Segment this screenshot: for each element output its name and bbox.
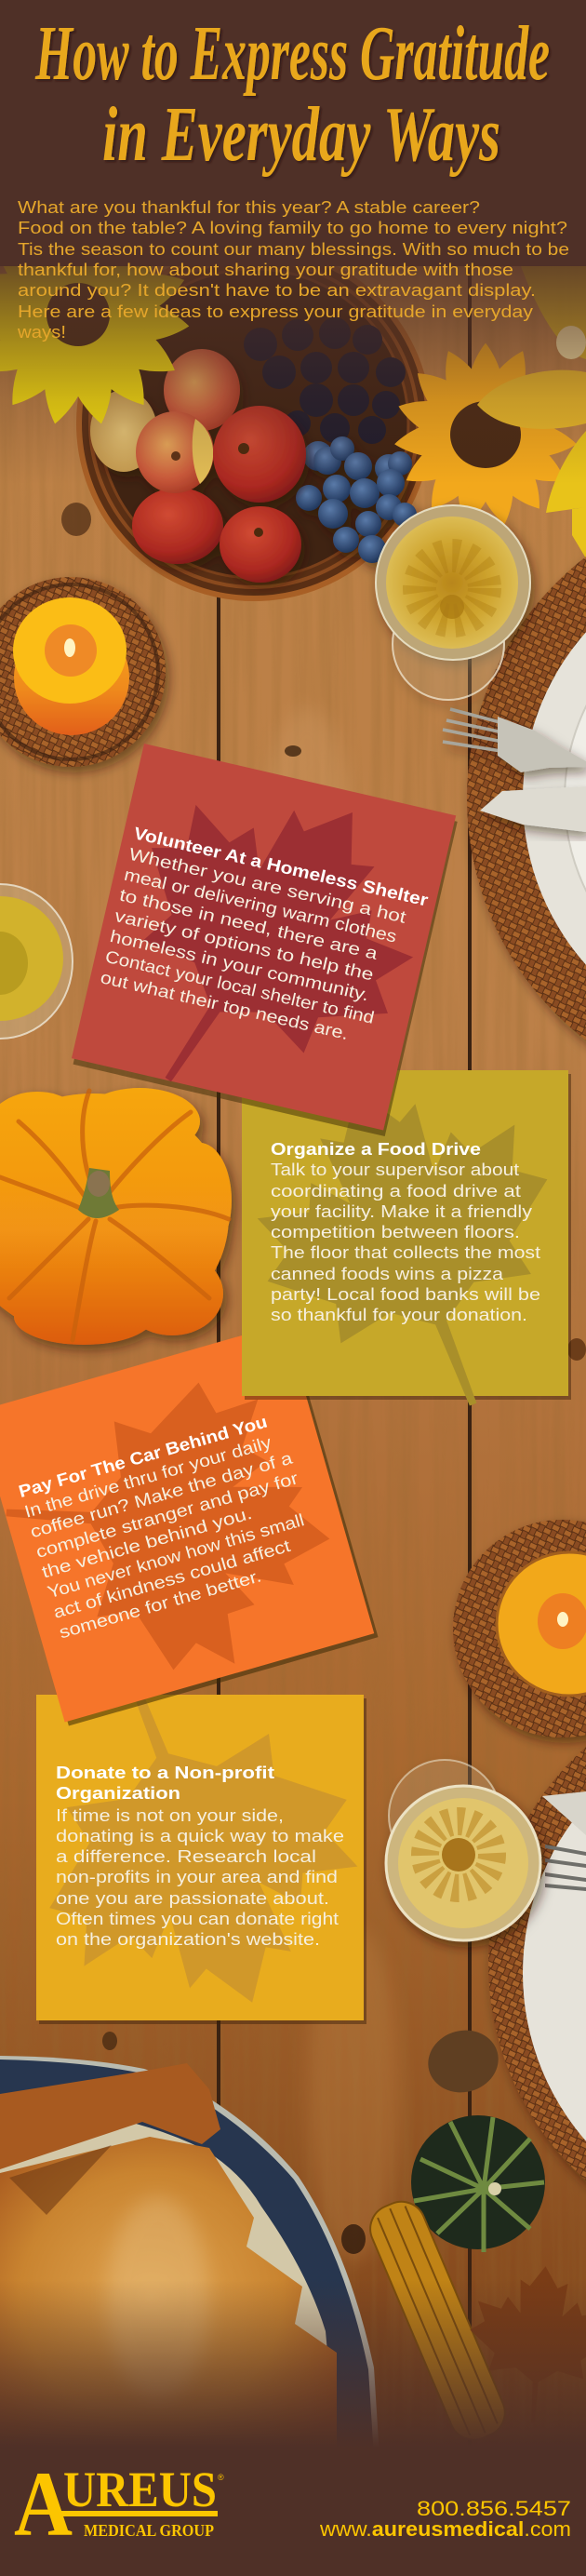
basket rim: [79, 248, 429, 598]
body text: [56, 1805, 344, 1949]
heading: [56, 1763, 274, 1803]
knife and fork: [542, 1791, 586, 1891]
walnut: [428, 2031, 499, 2092]
heading: Organize a Food Drive: [271, 1139, 481, 1159]
body text: competition between floors.: [271, 1222, 520, 1241]
heading: Donate to a Non-profit: [56, 1763, 274, 1782]
body text: canned foods wins a pizza: [271, 1264, 504, 1283]
intro text: What are you thankful for this year? A stable career?: [18, 197, 480, 217]
text: [17, 1407, 324, 1643]
logo: Aureus Medical Group: ®: [218, 2473, 224, 2482]
text: out what their top needs are.: [99, 967, 351, 1043]
pumpkin stem: [78, 1168, 119, 1218]
blue grapes: [296, 436, 417, 563]
text: Whether you are serving a hot: [127, 844, 408, 927]
text: [99, 823, 430, 1054]
leaf watermark: [217, 1040, 586, 1456]
text: to those in need, there are a: [118, 885, 380, 963]
body text: donating is a quick way to make: [56, 1826, 344, 1845]
intro text: [17, 197, 569, 342]
candle left: [0, 577, 166, 767]
candle right: [453, 1520, 586, 1737]
dinner plate bottom with placemat: [486, 1747, 586, 2191]
body text: so thankful for your donation.: [271, 1305, 527, 1324]
fork: [443, 709, 586, 772]
panel: donate to a non-profit: [0, 1614, 401, 2057]
body text: The floor that collects the most: [271, 1242, 540, 1262]
text: Volunteer At a Homeless Shelter: [132, 823, 430, 910]
wine glass top: [376, 505, 530, 700]
panel: volunteer at a homeless shelter: [48, 730, 471, 1161]
footer band: [0, 2447, 586, 2576]
text: someone for the better.: [57, 1565, 263, 1643]
body text: Talk to your supervisor about: [271, 1160, 519, 1179]
top fade overlay: [0, 266, 586, 484]
leaf watermark: [0, 1367, 342, 1683]
text: the vehicle behind you.: [39, 1503, 254, 1582]
body text: your facility. Make it a friendly: [271, 1201, 533, 1221]
body text: [271, 1160, 540, 1324]
pumpkin ribs: [0, 1091, 229, 1340]
turkey: [0, 2063, 337, 2457]
bottom fade overlay: [0, 2280, 586, 2448]
title: [34, 10, 550, 178]
fruit basket: [79, 248, 429, 598]
text: meal or delivering warm clothes: [123, 865, 399, 946]
text: In the drive thru for your daily: [22, 1432, 274, 1522]
panel: pay for the car behind you: [0, 1323, 379, 1726]
intro text: Tis the season to count our many blessings. With so much to be: [18, 239, 569, 259]
logo: Aureus Medical Group: MEDICAL GROUP: [84, 2521, 214, 2540]
text: complete stranger and pay for: [33, 1468, 300, 1562]
body text: party! Local food banks will be: [271, 1284, 540, 1304]
intro text: Food on the table? A loving family to go home to every night?: [18, 218, 567, 237]
contact info: www.aureusmedical .com: [319, 2517, 571, 2541]
text: homeless in your community.: [108, 926, 371, 1004]
panel: organize a food drive: [217, 1040, 586, 1456]
intro text: thankful for, how about sharing your gratitude with those: [18, 260, 513, 279]
text: You never know how this small: [46, 1509, 306, 1602]
body text: Often times you can donate right: [56, 1909, 339, 1928]
acorn squash: [411, 2115, 545, 2252]
intro text: ways!: [17, 322, 66, 342]
text: Contact your local shelter to find: [103, 946, 376, 1027]
apples: [90, 349, 306, 583]
leaf watermark: [0, 1614, 401, 2057]
text: Pay For The Car Behind You: [17, 1412, 270, 1501]
body text: non-profits in your area and find: [56, 1867, 338, 1886]
contact info: 800.856.5457: [417, 2497, 571, 2520]
sunflower: top left: [0, 266, 190, 424]
corn cob: [369, 2200, 504, 2437]
heading: Organization: [56, 1783, 180, 1803]
logo: Aureus Medical Group: [14, 2452, 224, 2556]
body text: coordinating a food drive at: [271, 1181, 521, 1201]
glass left: [0, 884, 73, 1039]
turkey platter: [0, 2056, 380, 2457]
text: variety of options to help the: [113, 906, 376, 985]
body text: a difference. Research local: [56, 1846, 316, 1866]
text: act of kindness could affect: [51, 1536, 292, 1622]
text: coffee run? Make the day of a: [28, 1447, 295, 1541]
logo: Aureus Medical Group: UREUS: [63, 2462, 217, 2517]
knife: [480, 786, 586, 832]
dark grapes: [244, 317, 406, 444]
logo: Aureus Medical Group: A: [14, 2452, 73, 2556]
leaf watermark: [48, 730, 471, 1161]
intro text: around you? It doesn't have to be an extravagant display.: [18, 280, 536, 300]
body text: If time is not on your side,: [56, 1805, 284, 1825]
body text: one you are passionate about.: [56, 1888, 329, 1908]
intro text: Here are a few ideas to express your gratitude in everyday: [18, 302, 534, 321]
sunflower: top right with leaves: [393, 266, 586, 558]
glass right: [386, 1760, 540, 1940]
dinner plate top with placemat: [443, 556, 586, 1052]
contact info: [319, 2497, 571, 2541]
dried leaves: [471, 2267, 586, 2366]
pumpkin: [0, 1088, 232, 1345]
body text: on the organization's website.: [56, 1929, 320, 1949]
